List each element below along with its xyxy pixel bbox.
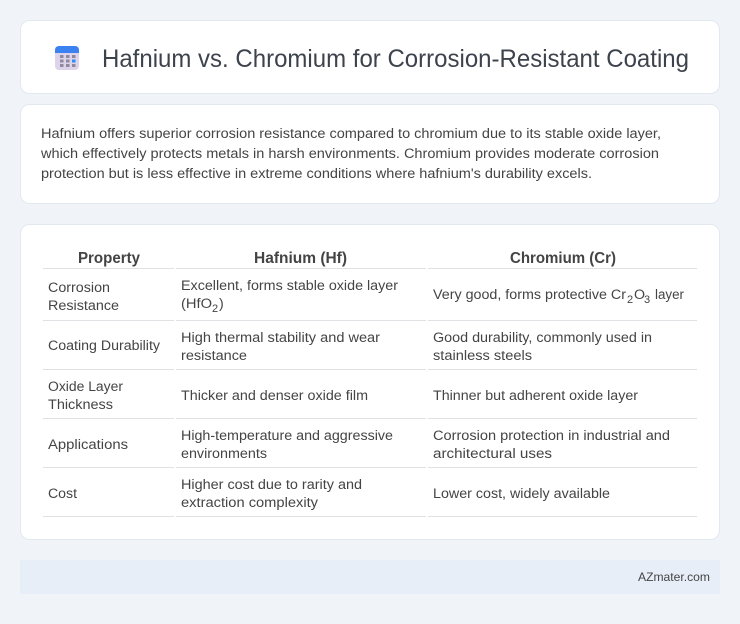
table header: Chromium (Cr) [510, 250, 616, 267]
summary text [40, 126, 661, 182]
footer brand: AZmater.com [638, 570, 710, 584]
row: corrosion resistance: Resistance [48, 298, 119, 314]
row: coating durability: Coating Durability [48, 338, 161, 354]
table header: Hafnium (Hf) [254, 250, 347, 267]
row: cost: Lower cost, widely available [433, 486, 610, 502]
row: corrosion resistance: Excellent, forms stable oxide layer [181, 278, 398, 294]
row: coating durability [48, 330, 652, 364]
footer bar [20, 560, 720, 594]
table header [78, 250, 616, 267]
summary text: Hafnium offers superior corrosion resistance compared to chromium due to its stable oxide layer, [41, 126, 661, 142]
row: coating durability: stainless steels [433, 348, 532, 364]
panel: title header [20, 20, 720, 94]
row: corrosion resistance: 2 [627, 294, 633, 306]
row: corrosion resistance: 3 [644, 294, 650, 306]
summary text: protection but is less effective in extreme conditions where hafnium's durability excels. [41, 166, 592, 182]
row: corrosion resistance [48, 278, 684, 315]
row: applications: High-temperature and aggressive [181, 428, 393, 444]
title: Hafnium vs. Chromium for Corrosion-Resistant Coating [102, 45, 689, 73]
row: cost [48, 477, 610, 511]
row: applications: environments [181, 446, 267, 462]
row: corrosion resistance: Very good, forms protective Cr [433, 287, 626, 303]
panel: comparison table [20, 224, 720, 540]
row: applications: Corrosion protection in industrial and [433, 428, 670, 444]
row: coating durability: High thermal stability and wear [181, 330, 380, 346]
row: oxide layer thickness: Thickness [48, 397, 113, 413]
icon: calendar [55, 46, 79, 70]
row: corrosion resistance: layer [655, 287, 684, 303]
row: coating durability: Good durability, commonly used in [433, 330, 652, 346]
row: cost: extraction complexity [181, 495, 319, 511]
row: cost: Cost [48, 486, 77, 502]
row: corrosion resistance: ) [219, 296, 224, 312]
table header: Property [78, 250, 140, 267]
row: corrosion resistance: (HfO [181, 296, 212, 312]
row: corrosion resistance: O [634, 287, 645, 303]
row: oxide layer thickness [48, 379, 638, 413]
row: corrosion resistance: 2 [212, 303, 218, 315]
row: oxide layer thickness: Thicker and denser oxide film [181, 388, 368, 404]
row: oxide layer thickness: Thinner but adherent oxide layer [433, 388, 638, 404]
row: coating durability: resistance [181, 348, 247, 364]
row: oxide layer thickness: Oxide Layer [48, 379, 123, 395]
row: applications: Applications [48, 437, 128, 453]
row: cost: Higher cost due to rarity and [181, 477, 362, 493]
row: applications: architectural uses [433, 446, 552, 462]
panel: summary [20, 104, 720, 204]
summary text: which effectively protects metals in harsh environments. Chromium provides moderate corrosion [40, 146, 659, 162]
row: applications [48, 428, 670, 462]
row: corrosion resistance: Corrosion [48, 280, 110, 296]
